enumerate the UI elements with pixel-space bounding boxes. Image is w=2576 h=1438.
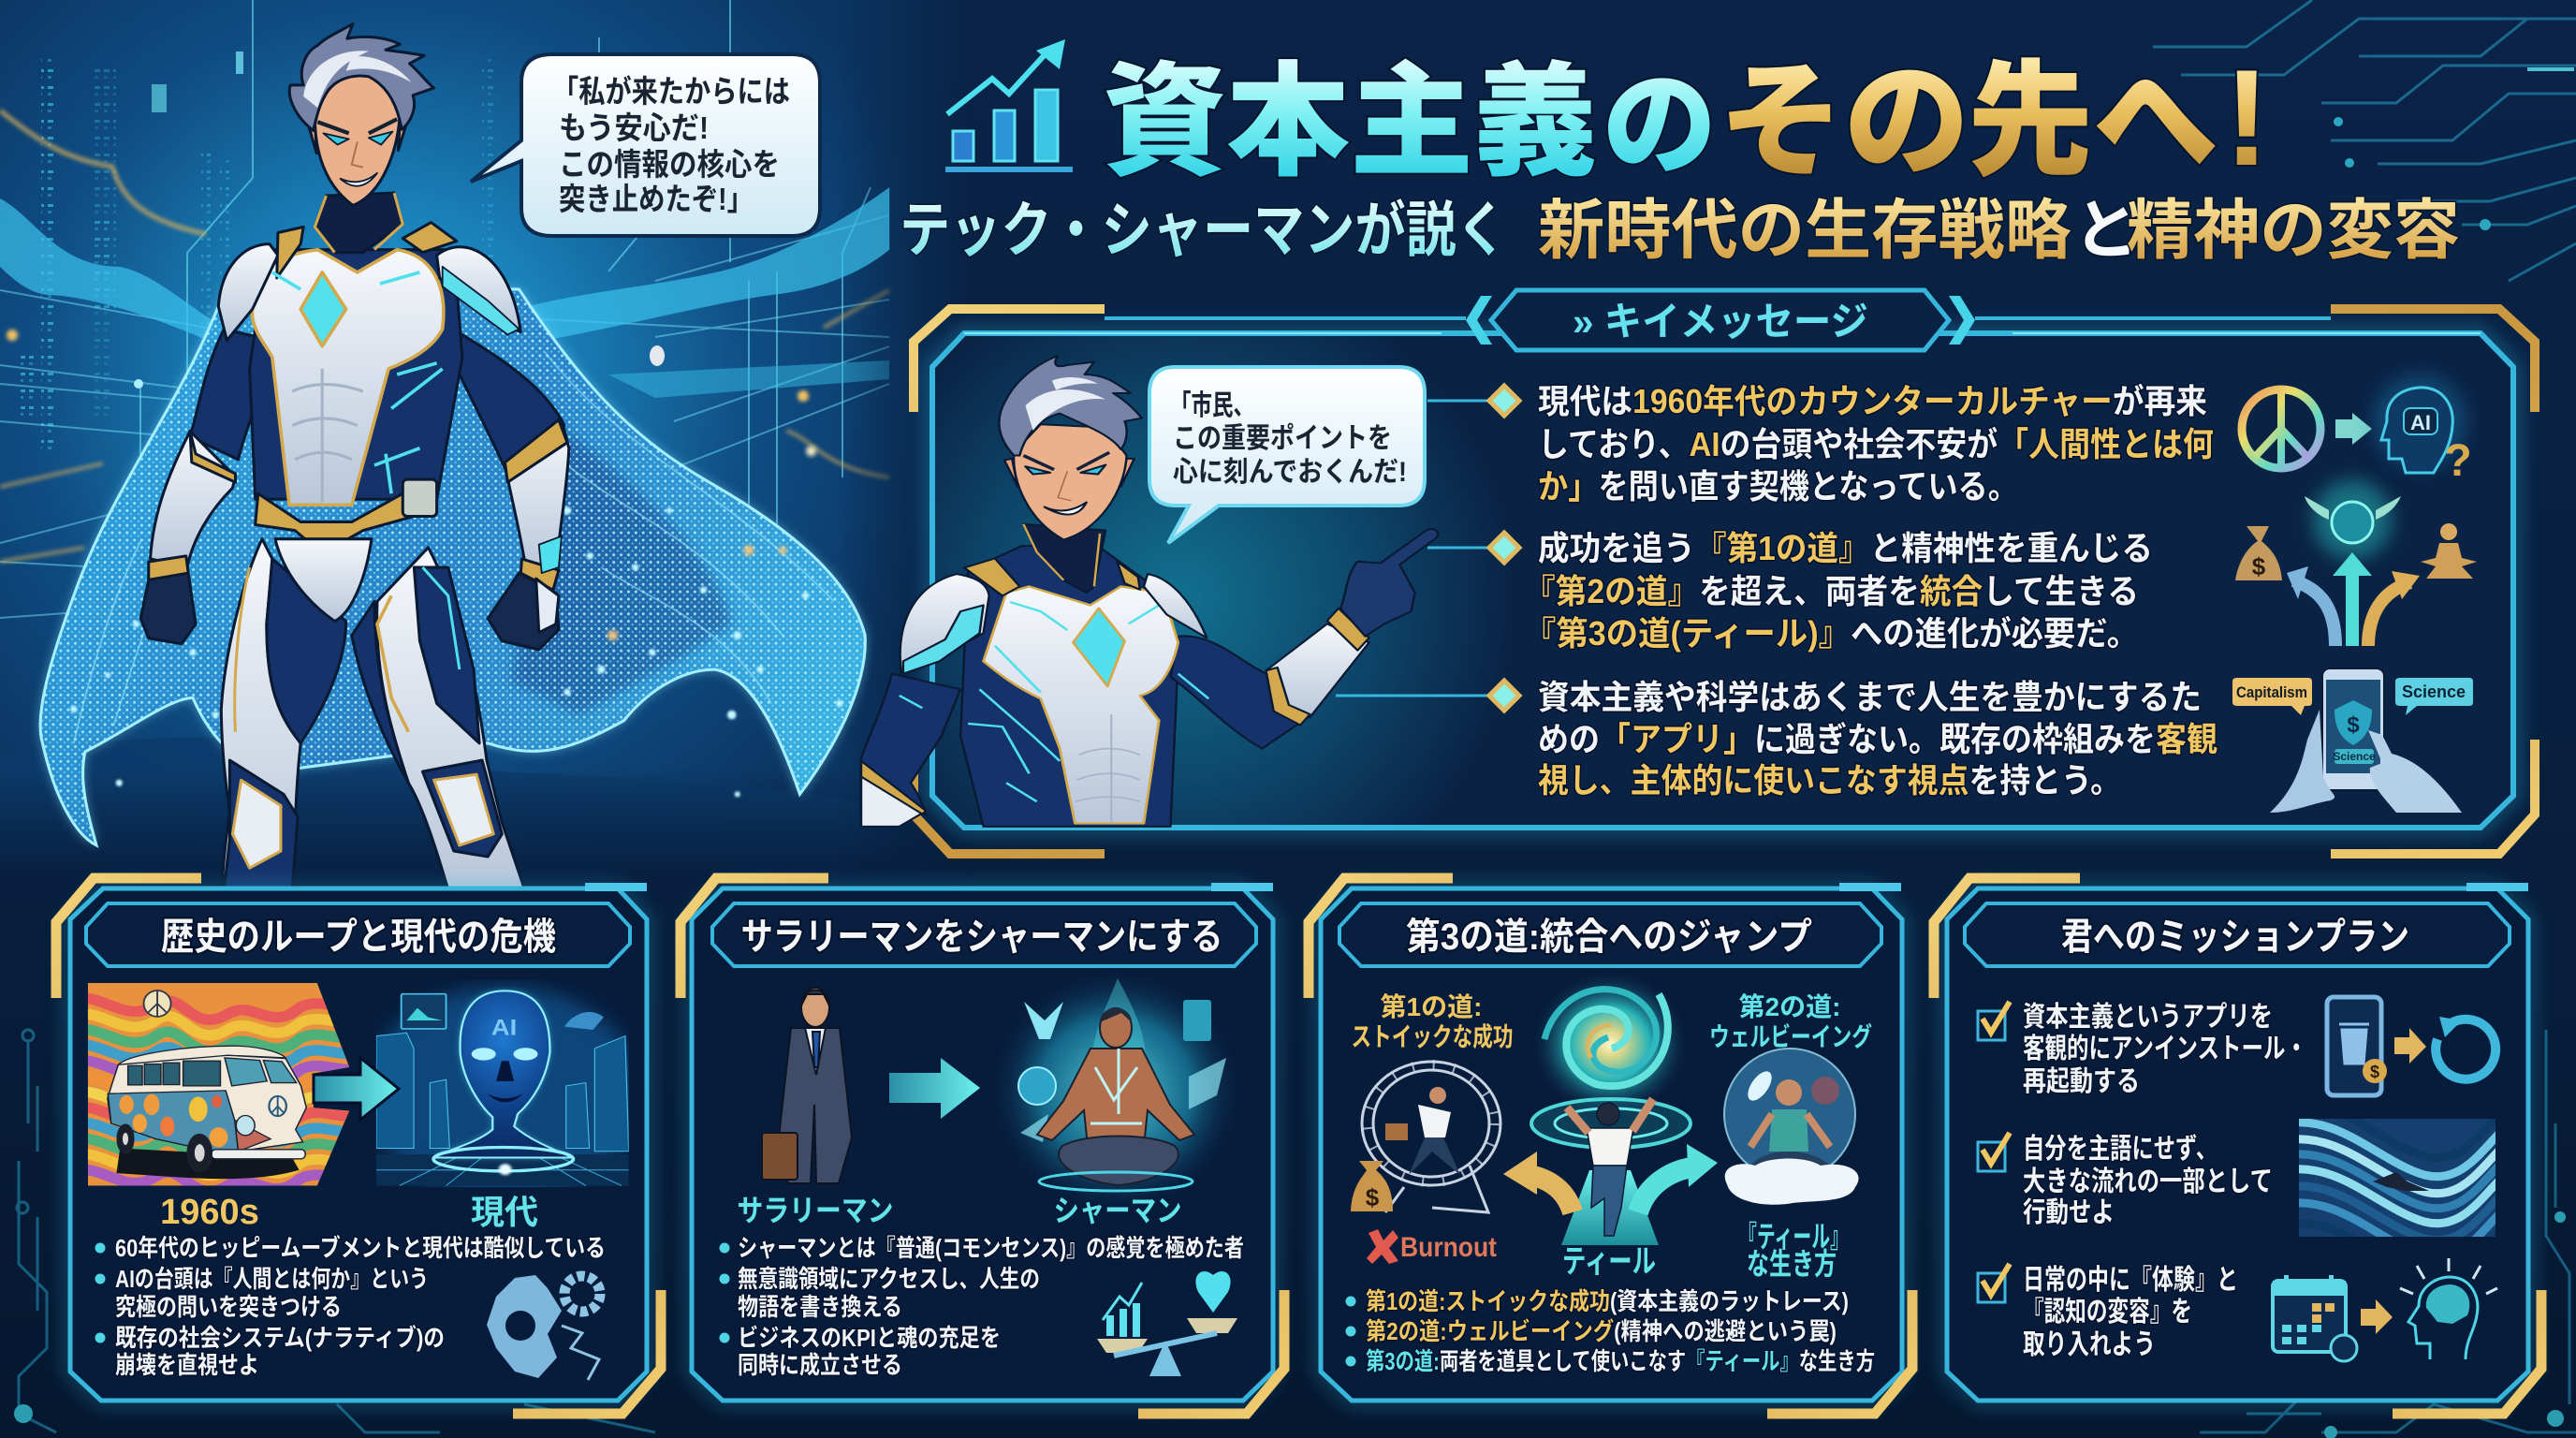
hair [999,356,1142,456]
panel glow [1321,888,1902,1401]
image: modern AI [367,986,639,1198]
title line one: その [1719,52,1969,192]
bubble text: 「市民、 [1170,390,1254,421]
panel glow [932,333,2513,828]
speech bubble: pointer [1149,367,1425,543]
icon: galaxy vortex [1531,971,1690,1148]
icon: uninstall and restart [2327,997,2496,1095]
gold brackets [1934,878,2541,1414]
bullet 2: 『第2の道』を超え、両者を統合して生きる [1524,572,2139,610]
label: 1960s: 1960s [160,1193,259,1232]
heading: 歴史のループと現代の危機 [161,917,556,958]
bullet 2 [1489,529,2153,653]
heading pill [1491,290,1949,350]
icon: hamster wheel [1362,1062,1500,1212]
mission 1 [1978,997,2496,1097]
hero: full body with digital cape [0,23,889,889]
label: burnout [1367,1229,1497,1264]
arrow [889,1058,980,1119]
nose [352,142,363,168]
panel: third way [1309,878,1912,1414]
image: modern AI: AI [491,1016,517,1040]
cape [40,284,865,845]
left leg [221,539,300,889]
mission 2 [1977,1119,2496,1237]
label: present: 現代 [471,1193,538,1231]
left arm [861,674,960,814]
panel glow [692,888,1273,1401]
torso [250,250,462,499]
mission 2: 行動せよ [2023,1197,2115,1228]
bullet 3: 視し、主体的に使いこなす視点を持とう。 [1538,761,2121,800]
torso [960,546,1178,827]
panel glow [70,888,647,1401]
icon: three paths [2235,480,2477,646]
title line one: 先 [1968,52,2093,192]
heading: サラリーマンをシャーマンにする [741,917,1222,958]
right pauldron [437,247,520,332]
bullet 1: しており、AIの台頭や社会不安が「人間性とは何 [1538,425,2214,463]
gold brackets [1309,878,1912,1414]
arms [190,329,272,460]
hero: pointing bust [861,356,1438,827]
checkbox [1978,1264,2010,1302]
brief [275,539,372,622]
icon: balance scale [1097,1271,1237,1376]
floor shape [131,738,593,800]
left pauldron [900,574,989,674]
hair [289,23,434,130]
belt [256,488,434,540]
bullet list [1346,1287,1875,1375]
face [315,74,401,205]
label: teal way of life: 『ティール』 [1738,1220,1849,1254]
title line two [900,194,2460,267]
label: second path: ウェルビーイング [1709,1021,1872,1051]
title line one: ! [2224,41,2270,194]
speech tag: capitalism [2232,678,2312,715]
mission 1: 再起動する [2023,1066,2140,1097]
panel frame [1321,888,1902,1401]
left hero scene background [0,0,973,901]
bubble text [1170,390,1407,488]
icon: rising chart [945,39,1073,172]
bullet list: 同時に成立させる [738,1351,902,1379]
icon: calendar to brain [2273,1258,2497,1361]
bubble text: 突き止めたぞ!」 [559,182,754,216]
checkbox [1978,1133,2010,1171]
label: second path: 第2の道: [1739,992,1840,1021]
mission 3: 日常の中に『体験』と [2023,1265,2238,1296]
bullet list: AIの台頭は『人間とは何か』という [115,1265,429,1293]
data streams [0,0,889,712]
nose [1058,471,1071,501]
icon: peace to AI: ? [2444,436,2472,486]
checkbox [1978,1002,2010,1040]
label: teal way of life: な生き方 [1747,1247,1837,1281]
neck collar [315,193,402,253]
bullet 2: 成功を追う『第1の道』と精神性を重んじる [1538,529,2153,567]
label: teal way of life [1738,1220,1849,1281]
icon: wellbeing bubble [1724,1049,1859,1205]
gem [1073,609,1125,686]
bullet 1 [1489,382,2214,506]
arrow [314,1058,399,1120]
collar [1023,524,1105,593]
figure: salaryman [762,988,852,1183]
panel: history loop [56,878,661,1414]
image: 1960s hippie van [88,983,350,1185]
bubble text: この重要ポイントを [1173,423,1392,454]
mission 1: 客観的にアンインストール・ [2023,1034,2307,1064]
speech tag: capitalism: Capitalism [2236,683,2307,701]
mission 3: 取り入れよう [2023,1329,2156,1360]
title line two: と [2073,194,2139,267]
title line one: へ [2093,52,2218,192]
connector lines [1336,401,1491,696]
figure: shaman [989,969,1242,1212]
circuit traces: top right [2153,0,2576,281]
title [900,41,2460,267]
panel: key message [914,290,2535,854]
speech tag: science [2395,678,2473,715]
icon: uninstall and restart: $ [2370,1063,2379,1081]
abs [292,369,363,502]
mouth [341,173,377,186]
bullet list: ビジネスのKPIと魂の充足を [738,1324,1001,1352]
panel: mission plan [1934,878,2541,1414]
bullet list [719,1234,1244,1379]
heading pill [1965,903,2510,966]
bubble text: 心に刻んでおくんだ! [1173,457,1407,488]
bullet list: 究極の問いを突きつける [115,1293,342,1321]
bullet list [95,1234,606,1379]
icon: three paths: $ [2252,552,2266,580]
van [108,1046,306,1179]
speech tag: science: Science [2402,682,2466,701]
mission 3: 『認知の変容』を [2023,1297,2192,1328]
eyes [323,132,392,145]
right leg [377,548,525,889]
right pauldron [1144,574,1207,638]
arrows: fork [1503,1144,1718,1245]
heading pill [1339,903,1881,966]
bullet list: 無意識領域にアクセスし、人生の [738,1265,1040,1293]
left pauldron [218,244,278,341]
gold brackets [56,878,661,1414]
gold brackets [681,878,1284,1414]
floor fade [0,787,941,878]
bullet 1: 現代は1960年代のカウンターカルチャーが再来 [1538,382,2207,420]
bubble text: この情報の核心を [559,147,780,182]
gold corner brackets [914,309,2535,854]
peace badge [144,990,171,1017]
title line two: 新時代の生存戦略 [1538,194,2071,267]
chest gem [300,272,346,346]
icon: capitalism phone: $ [2347,712,2360,738]
label: teal: ティール [1562,1244,1656,1280]
speech bubble: hero [471,54,820,236]
label: first path: 第1の道: [1381,992,1482,1021]
bullet 2: 『第3の道(ティール)』への進化が必要だ。 [1524,614,2139,653]
label: first path [1352,992,1513,1051]
mission 1: 資本主義というアプリを [2023,1002,2273,1033]
bullet list: 60年代のヒッピームーブメントと現代は酷似している [115,1234,606,1262]
icon: broken gears [487,1275,600,1380]
title line one: 資本主義 [1103,53,1597,191]
bullet 3 [1489,678,2217,800]
heading: 第3の道:統合へのジャンプ [1406,917,1812,958]
bullet list: シャーマンとは『普通(コモンセンス)』の感覚を極めた者 [738,1234,1244,1262]
icon: money bag [1351,1161,1393,1211]
bullet list: 第1の道:ストイックな成功(資本主義のラットレース) [1366,1287,1849,1315]
heading pill [86,903,630,966]
panel frame [692,888,1273,1401]
mission 3 [1978,1258,2497,1361]
abs [1075,714,1140,823]
image: river flow [2299,1119,2496,1237]
panel frame [70,888,647,1401]
bubble text: 「私が来たからには [552,74,790,109]
mission 2: 自分を主語にせず、 [2023,1134,2217,1165]
hero body [140,23,569,889]
icon: money bag: $ [1366,1183,1380,1211]
bullet list: 第3の道:両者を道具として使いこなす『ティール』な生き方 [1366,1347,1875,1375]
panel frame [1947,888,2528,1401]
title line two: テック・シャーマンが説く [900,197,1507,264]
right arm [1170,636,1308,749]
panel glow [1947,888,2528,1401]
mouth [1045,502,1087,515]
icon: capitalism phone [2232,668,2473,813]
label: salaryman: サラリーマン [738,1194,893,1227]
panel: salaryman to shaman [681,878,1284,1414]
mission 2: 大きな流れの一部として [2023,1167,2273,1197]
icon: peace to AI [2242,374,2472,486]
bubble text: もう安心だ! [559,110,709,145]
chest armor [984,586,1178,823]
bullet 3: めの「アプリ」に過ぎない。既存の枠組みを客観 [1538,720,2217,758]
label: burnout: Burnout [1400,1232,1497,1263]
heading pill [712,903,1256,966]
ears [1004,459,1134,487]
icon: capitalism phone: Science [2333,750,2376,763]
panel frame [932,333,2513,828]
bullet list: 物語を書き換える [738,1293,902,1321]
bullet list: 第2の道:ウェルビーイング(精神への逃避という罠) [1366,1317,1837,1345]
title line one: の [1603,62,1717,189]
title line two: 精神の変容 [2127,194,2460,267]
bullet list: 既存の社会システム(ナラティブ)の [115,1324,445,1352]
label: shaman: シャーマン [1054,1194,1181,1227]
figure: jumping person [1567,1099,1653,1236]
heading: 君へのミッションプラン [2061,917,2409,958]
bullet 3: 資本主義や科学はあくまで人生を豊かにするた [1538,678,2202,716]
circuit traces: bottom left [14,1030,655,1432]
heading text: » キイメッセージ [1573,300,1868,344]
icon: peace to AI: AI [2410,411,2431,434]
cape wave band right [528,187,889,341]
circuit traces: right and bottom [2200,1030,2576,1438]
label: first path: ストイックな成功 [1352,1022,1513,1051]
bullet list: 崩壊を直視せよ [115,1351,259,1379]
bullet 1: か」を問い直す契機となっている。 [1538,467,2018,506]
label: second path [1709,992,1872,1051]
bubble text [552,74,790,216]
eyes [1025,465,1105,475]
ears [309,122,406,154]
cape wave band left [0,198,227,349]
face [1014,424,1127,539]
